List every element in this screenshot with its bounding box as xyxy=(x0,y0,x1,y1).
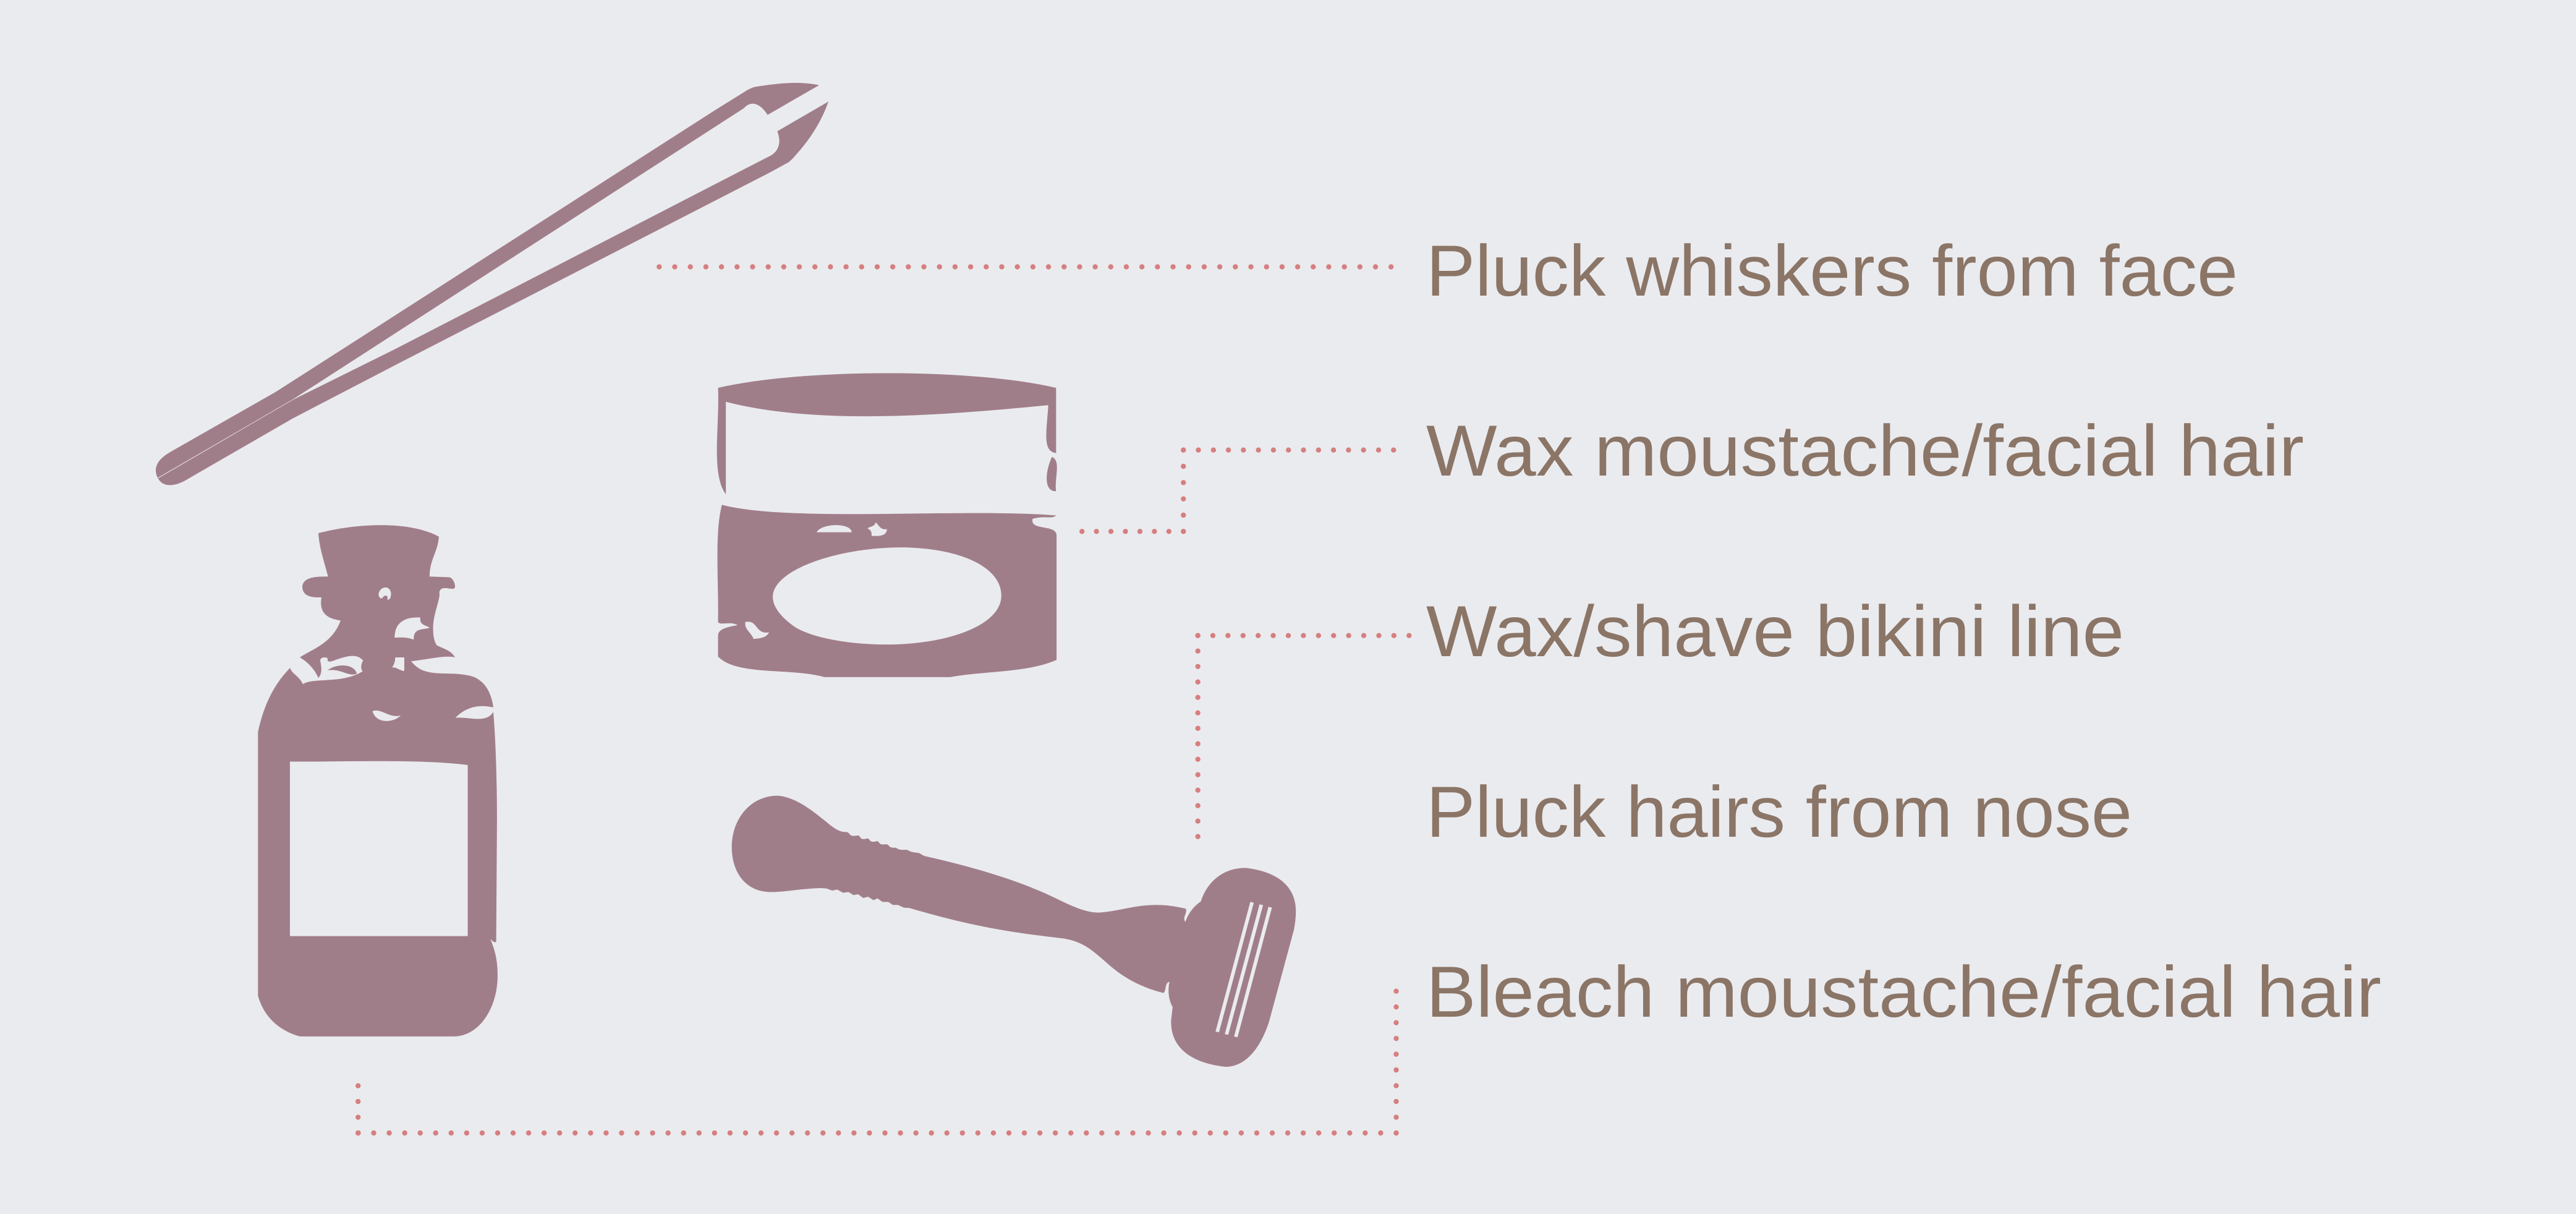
icon: wax jar xyxy=(717,373,1057,677)
razor blades xyxy=(1215,902,1272,1037)
dotted leader: jar to wax moustache xyxy=(1081,450,1393,532)
label: wax moustache/facial hair: Wax moustache/facial hair xyxy=(1426,410,2304,491)
icon: bottle xyxy=(258,525,498,1037)
icon: tweezers xyxy=(156,83,828,485)
label: pluck whiskers from face: Pluck whiskers from face xyxy=(1426,230,2238,311)
icon: razor xyxy=(732,796,1296,1067)
dotted leader: razor to wax/shave bikini line xyxy=(1197,636,1409,837)
jar body with label xyxy=(718,505,1056,677)
label: wax/shave bikini line: Wax/shave bikini line xyxy=(1426,591,2124,672)
label: bleach moustache/facial hair: Bleach moustache/facial hair xyxy=(1426,951,2381,1032)
dotted leader: tweezers to pluck whiskers xyxy=(659,264,1392,270)
dotted leader: bottle to bleach moustache xyxy=(357,991,1396,1134)
label: pluck hairs from nose: Pluck hairs from nose xyxy=(1426,771,2132,852)
jar lid xyxy=(717,373,1056,494)
lid highlight sliver xyxy=(1047,457,1057,491)
